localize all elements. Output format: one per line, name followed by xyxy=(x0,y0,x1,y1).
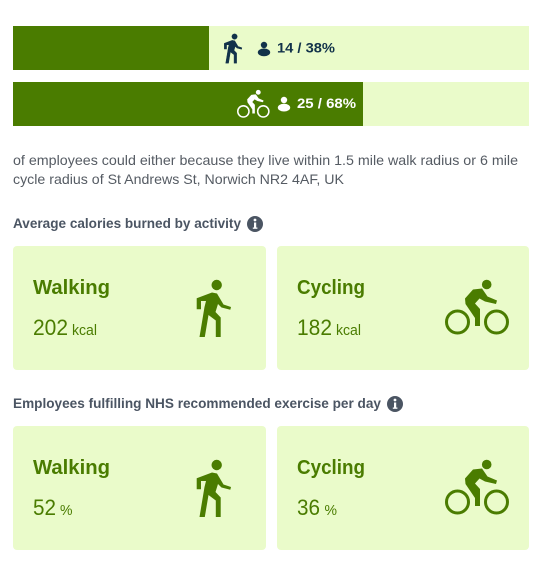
panel: walking calories: kcal xyxy=(72,323,97,339)
description text xyxy=(13,152,518,187)
panel: cycling calories: Cycling xyxy=(297,277,365,299)
panel: cycling exercise: Cycling xyxy=(297,457,365,479)
panel: walking exercise: % xyxy=(60,503,73,519)
panel: cycling exercise: % xyxy=(324,503,337,519)
panel: cycling calories: 182 xyxy=(297,315,332,340)
panel: walking exercise: Walking xyxy=(33,457,110,479)
cycling count: 25 / 68% xyxy=(297,95,357,111)
heading: NHS exercise: Employees fulfilling NHS recommended exercise per day xyxy=(13,396,381,411)
panel: walking calories: Walking xyxy=(33,277,110,299)
description text: cycle radius of St Andrews St, Norwich NR2 4AF, UK xyxy=(13,171,345,187)
icon: walking person xyxy=(197,280,231,337)
icon: cyclist xyxy=(446,460,508,513)
cycling bar xyxy=(13,82,529,126)
icon: info xyxy=(387,396,403,412)
icon: walking person xyxy=(197,460,231,517)
walking bar xyxy=(13,26,529,70)
heading: average calories: Average calories burned by activity xyxy=(13,216,241,231)
icon: person xyxy=(258,42,270,56)
panel: walking calories xyxy=(13,246,266,370)
icon: cyclist xyxy=(446,280,508,333)
walking count: 14 / 38% xyxy=(277,40,336,56)
panel: walking calories: 202 xyxy=(33,315,68,340)
panel: cycling exercise: 36 xyxy=(297,495,320,520)
icon: info xyxy=(247,216,263,232)
icon: walking person xyxy=(224,34,242,63)
icon: cyclist xyxy=(238,90,269,117)
panel: cycling calories xyxy=(277,246,529,370)
description text: of employees could either because they live within 1.5 mile walk radius or 6 mile xyxy=(13,152,518,168)
icon: person xyxy=(278,97,290,112)
panel: walking exercise xyxy=(13,426,266,550)
panel: walking exercise: 52 xyxy=(33,495,56,520)
panel: cycling calories: kcal xyxy=(336,323,361,339)
panel: cycling exercise xyxy=(277,426,529,550)
